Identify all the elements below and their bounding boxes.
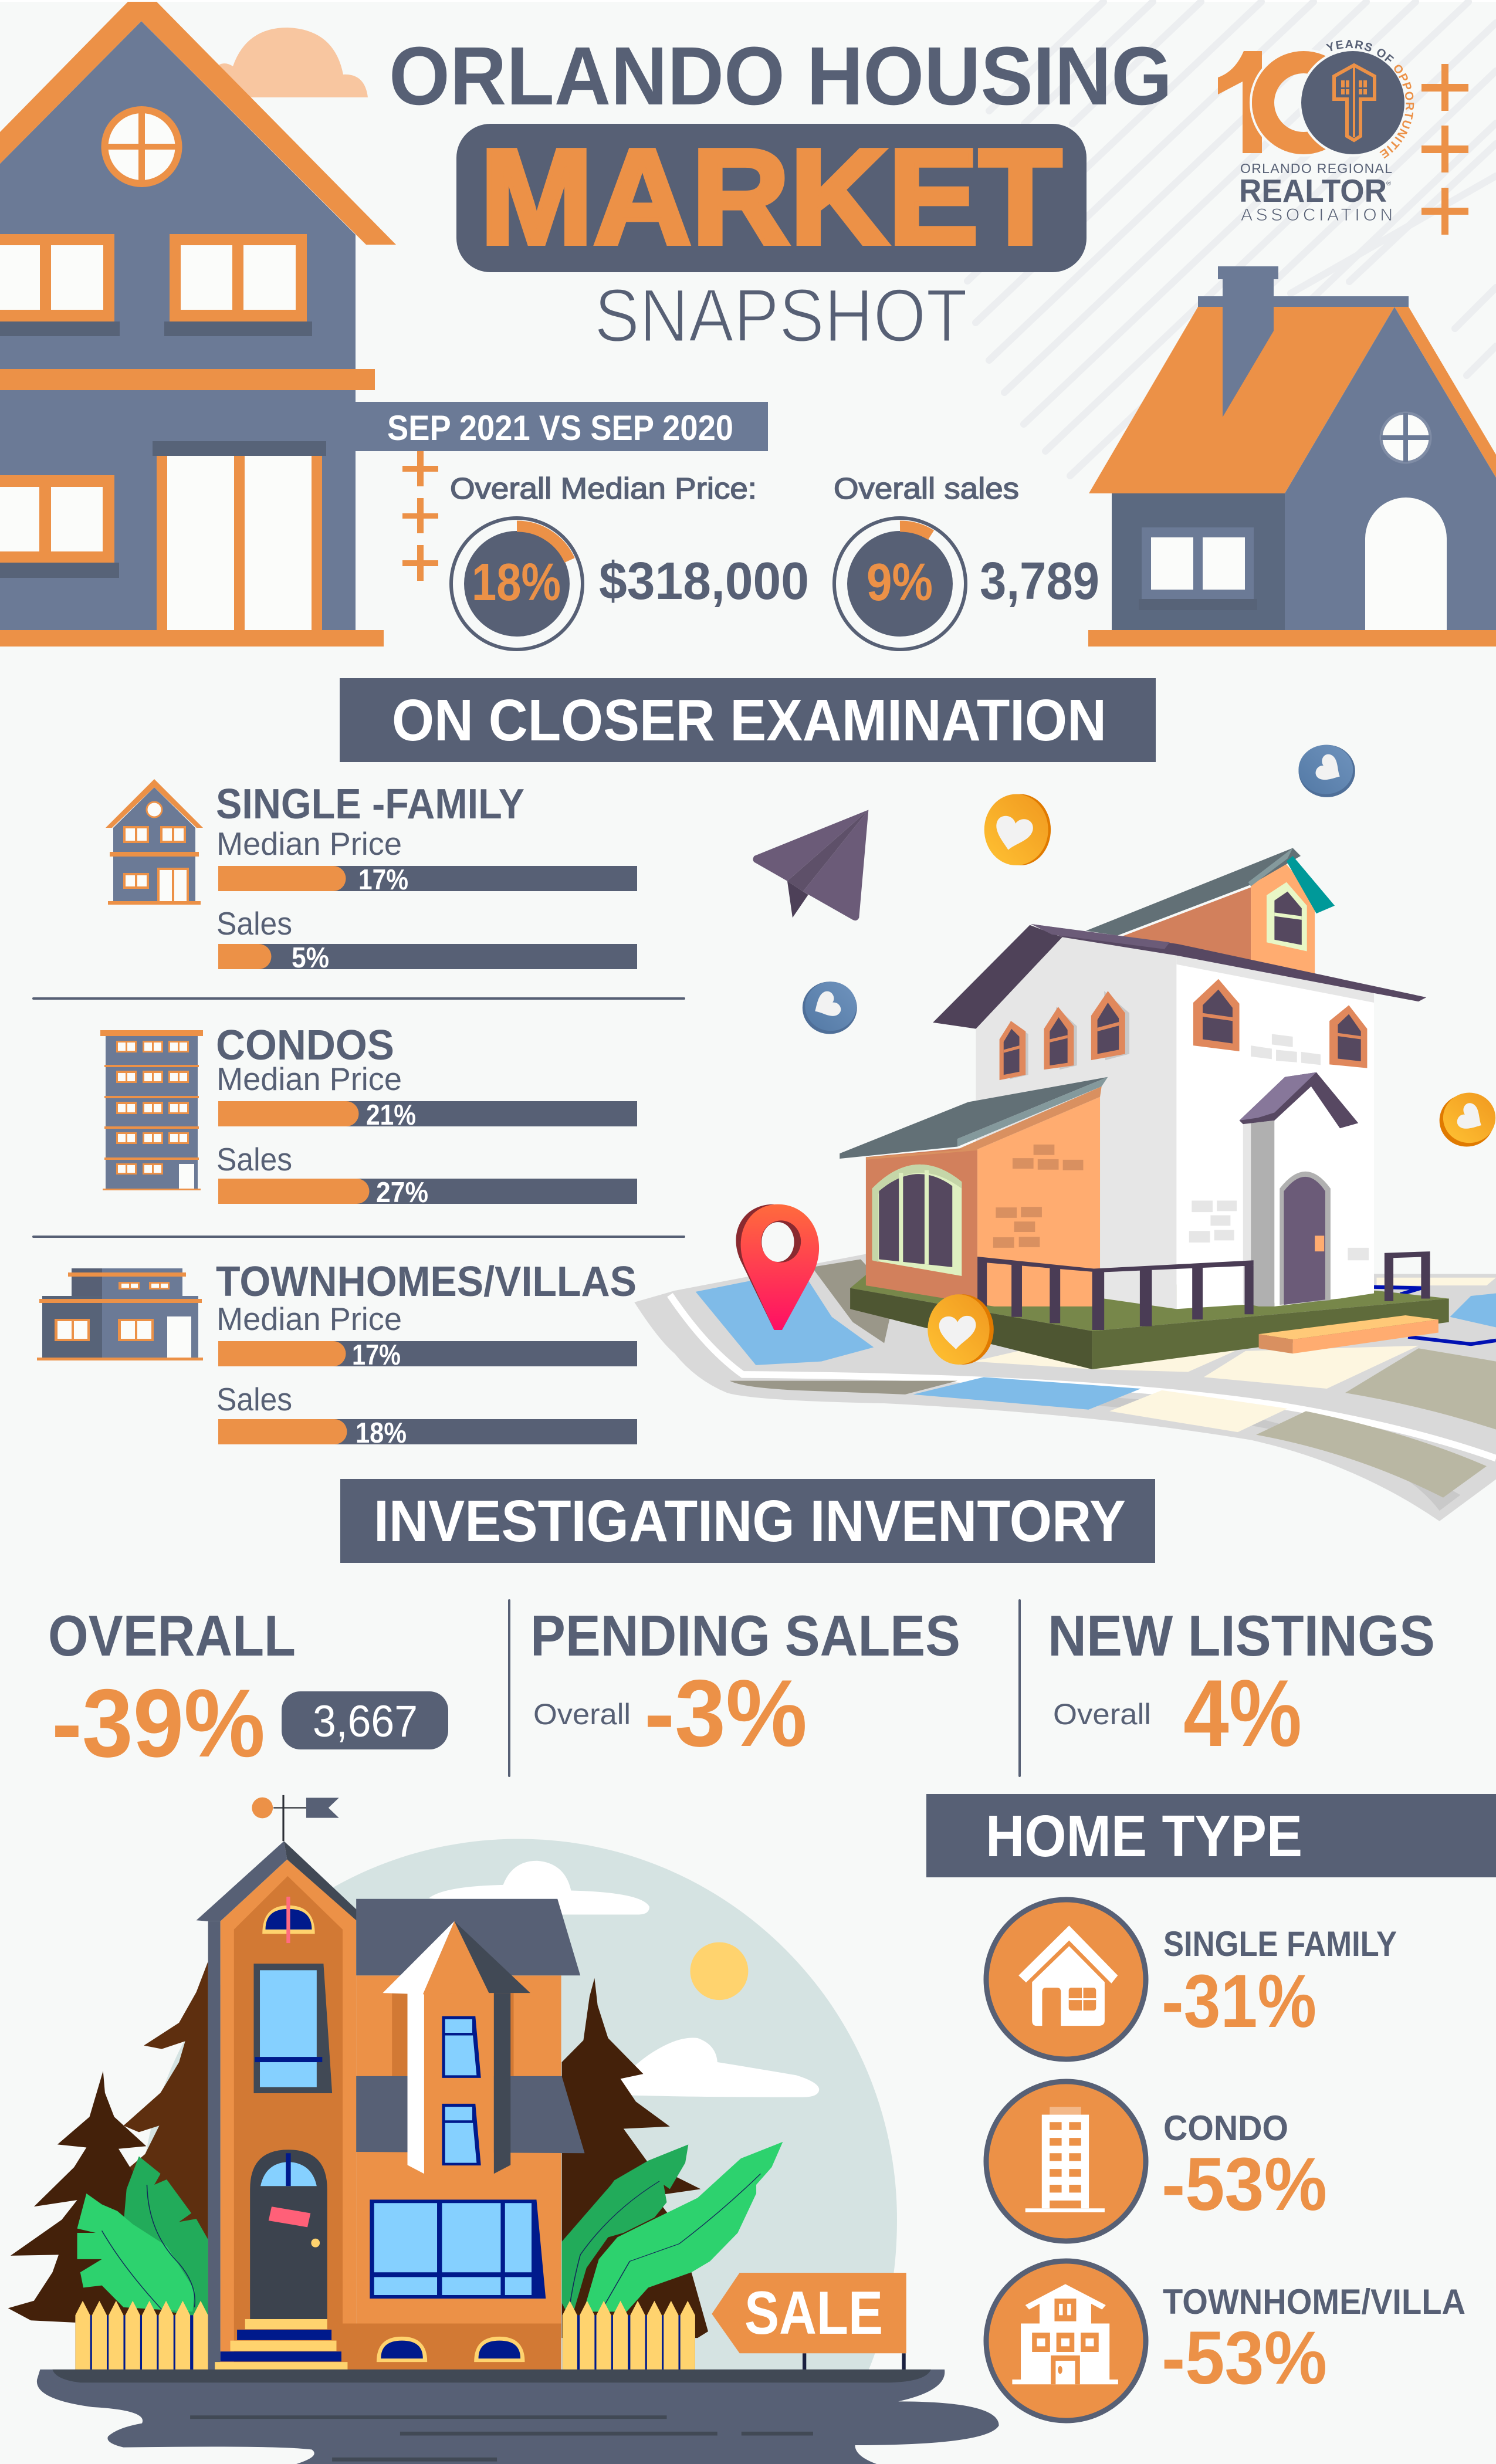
section heading: home type: HOME TYPE: [986, 1803, 1302, 1869]
panel: single family: Sales: [216, 905, 292, 942]
date ribbon: SEP 2021 VS SEP 2020: [387, 408, 733, 448]
background circle: [140, 1839, 897, 2373]
clouds: [429, 1861, 649, 1915]
illustration: blue house with orange trim (left): [0, 2, 396, 647]
home type: single family: [986, 1900, 1397, 2059]
stat: new listings: 4%: [1183, 1660, 1302, 1766]
left fence: [75, 2301, 208, 2373]
stat: overall sales: 3,789: [980, 552, 1099, 611]
stat: new listings: NEW LISTINGS: [1048, 1603, 1435, 1668]
bar: sales 18%: 18%: [356, 1417, 407, 1449]
cloud lower: [605, 2038, 819, 2097]
sale sign posts: [803, 2353, 906, 2377]
stat: pending sales: [530, 1603, 960, 1766]
home type: townhome and villa: -53%: [1162, 2316, 1327, 2400]
logo: Orlando Regional Realtor Association 100 years: ASSOCIATION: [1241, 205, 1393, 225]
bar: sales 5%: 5%: [292, 942, 329, 974]
icon: single family house: [106, 779, 203, 905]
sale sign text: SALE: [744, 2279, 883, 2347]
plus signs left of stats: [402, 451, 438, 581]
panel: townhomes and villas: Sales: [216, 1381, 292, 1417]
stat: overall median price: [450, 472, 809, 649]
panel: townhomes and villas: TOWNHOMES/VILLAS: [216, 1258, 637, 1305]
upper windows: [0, 234, 312, 336]
street: [37, 2370, 999, 2464]
plus signs near logo: [1421, 64, 1468, 235]
stat: new listings: [1048, 1603, 1435, 1766]
donut 9%: [834, 518, 966, 649]
railing: [977, 1251, 1430, 1330]
illustration: orange roof house (right): [1088, 266, 1496, 647]
icon: townhome: [37, 1268, 203, 1360]
icon: house in circle: [986, 1900, 1146, 2059]
home type: single family: SINGLE FAMILY: [1163, 1924, 1397, 1964]
bar: sales 18%: [218, 1417, 637, 1449]
stat: overall inventory: [48, 1603, 448, 1777]
panel: single family: Median Price: [216, 825, 402, 862]
wall windows: [1000, 979, 1367, 1080]
stat: new listings: Overall: [1053, 1698, 1151, 1731]
stat: overall median price: $318,000: [599, 552, 809, 611]
front door: [250, 2150, 327, 2319]
panel: townhomes and villas: [37, 1258, 637, 1449]
left pine: [8, 2071, 208, 2373]
double door: [153, 441, 326, 630]
bar: sales 27%: [218, 1177, 637, 1209]
home type: townhome and villa: TOWNHOME/VILLA: [1163, 2282, 1465, 2321]
donut 9%: 9%: [867, 553, 933, 612]
home type: townhome and villa: [986, 2261, 1465, 2421]
stat: overall median price: Overall Median Price:: [450, 472, 757, 505]
map pin: [736, 1204, 819, 1330]
icon: tower in circle: [986, 2081, 1146, 2241]
dormer: [1086, 848, 1335, 974]
back pine: [123, 1961, 208, 2373]
donut 18%: 18%: [472, 553, 561, 612]
stat: pending sales: PENDING SALES: [530, 1603, 960, 1668]
logo: Orlando Regional Realtor Association 100 years: ®: [1386, 180, 1391, 187]
lower window: [0, 475, 119, 578]
icon: townhome in circle: [986, 2261, 1146, 2421]
stat: overall sales: [834, 472, 1099, 649]
house left strip: [208, 1921, 221, 2373]
large window: [370, 2199, 546, 2299]
bar: median price 17%: [218, 864, 637, 896]
panel: single family: [106, 779, 637, 974]
donut 18%: [451, 518, 583, 649]
heart badge: orange right: [1440, 1093, 1495, 1147]
home type: single family: -31%: [1162, 1959, 1316, 2043]
icon: condo building: [100, 1030, 203, 1190]
main building walls: [976, 937, 1374, 1309]
bar: sales 5%: [218, 942, 637, 974]
bar: median price 17%: 17%: [358, 864, 408, 896]
panel: condos: CONDOS: [216, 1022, 394, 1069]
logo: Orlando Regional Realtor Association 100 years: [1218, 40, 1414, 225]
wooden plank: [1259, 1315, 1439, 1353]
attic round window: [101, 106, 182, 187]
section heading: investigating inventory: INVESTIGATING INVENTORY: [374, 1488, 1126, 1554]
section heading: on closer examination: ON CLOSER EXAMINATION: [392, 688, 1106, 753]
heart badge: blue top right: [1298, 745, 1355, 797]
pill: 3,667: 3,667: [313, 1697, 418, 1747]
weather vane: [252, 1795, 339, 1841]
leaves: [77, 2142, 783, 2320]
title badge: Market: MARKET: [480, 121, 1062, 272]
home type: condo: -53%: [1162, 2143, 1327, 2226]
pill: 3,667: [282, 1691, 448, 1749]
stat: overall inventory: OVERALL: [48, 1603, 296, 1668]
window: [1139, 527, 1257, 610]
tower: [197, 1841, 368, 2373]
paper plane: [753, 810, 868, 920]
tower windows: [253, 1897, 332, 2093]
home type: condo: [986, 2081, 1327, 2241]
subtitle: Snapshot: SNAPSHOT: [594, 274, 967, 358]
cloud behind left house: [219, 28, 368, 97]
stat: overall inventory: -39%: [52, 1669, 265, 1777]
bar: sales 27%: 27%: [376, 1177, 428, 1209]
round window: [1381, 413, 1430, 462]
logo: Orlando Regional Realtor Association 100 years: REALTOR: [1239, 172, 1387, 209]
bar: median price 21%: [218, 1099, 637, 1131]
illustration: isometric house on map: [634, 745, 1496, 1521]
sun: [690, 1942, 748, 2000]
porch and door: [1240, 1072, 1358, 1307]
steps: [215, 2319, 347, 2372]
basement windows: [377, 2337, 524, 2362]
arched door: [1365, 497, 1447, 630]
panel: single family: SINGLE -FAMILY: [216, 781, 524, 828]
orange annex: [840, 1077, 1108, 1307]
right fence: [563, 2301, 695, 2373]
bar: median price 21%: 21%: [366, 1099, 416, 1131]
panel: condos: [100, 1022, 637, 1209]
panel: townhomes and villas: Median Price: [216, 1301, 402, 1337]
folded city map: [634, 1254, 1496, 1521]
step risers: [221, 2330, 341, 2361]
stat: overall sales: Overall sales: [834, 472, 1019, 505]
bar: median price 17%: 17%: [352, 1339, 401, 1371]
logo: Orlando Regional Realtor Association 100 years: ORLANDO REGIONAL: [1240, 161, 1392, 176]
heart badge: orange bottom: [928, 1294, 994, 1365]
heart badge: blue left: [803, 981, 857, 1034]
home type: condo: CONDO: [1163, 2108, 1288, 2148]
panel: condos: Sales: [216, 1141, 292, 1177]
wall bricks: [1037, 966, 1369, 1260]
green platform: [850, 1275, 1449, 1369]
stat: pending sales: Overall: [533, 1698, 631, 1731]
right pine: [562, 1978, 708, 2338]
title: Orlando Housing: ORLANDO HOUSING: [389, 29, 1172, 122]
stat: pending sales: -3%: [644, 1660, 807, 1766]
section heading: home type: [926, 1794, 1496, 1877]
panel: condos: Median Price: [216, 1061, 402, 1097]
main roof: [933, 924, 1426, 1029]
sale sign board: [712, 2273, 906, 2353]
bay tower: [383, 1921, 530, 2174]
bar: median price 17%: [218, 1339, 637, 1371]
heart badge: orange top: [984, 794, 1051, 865]
illustration: orange house for sale: [8, 1795, 999, 2464]
main block: [343, 1899, 585, 2373]
